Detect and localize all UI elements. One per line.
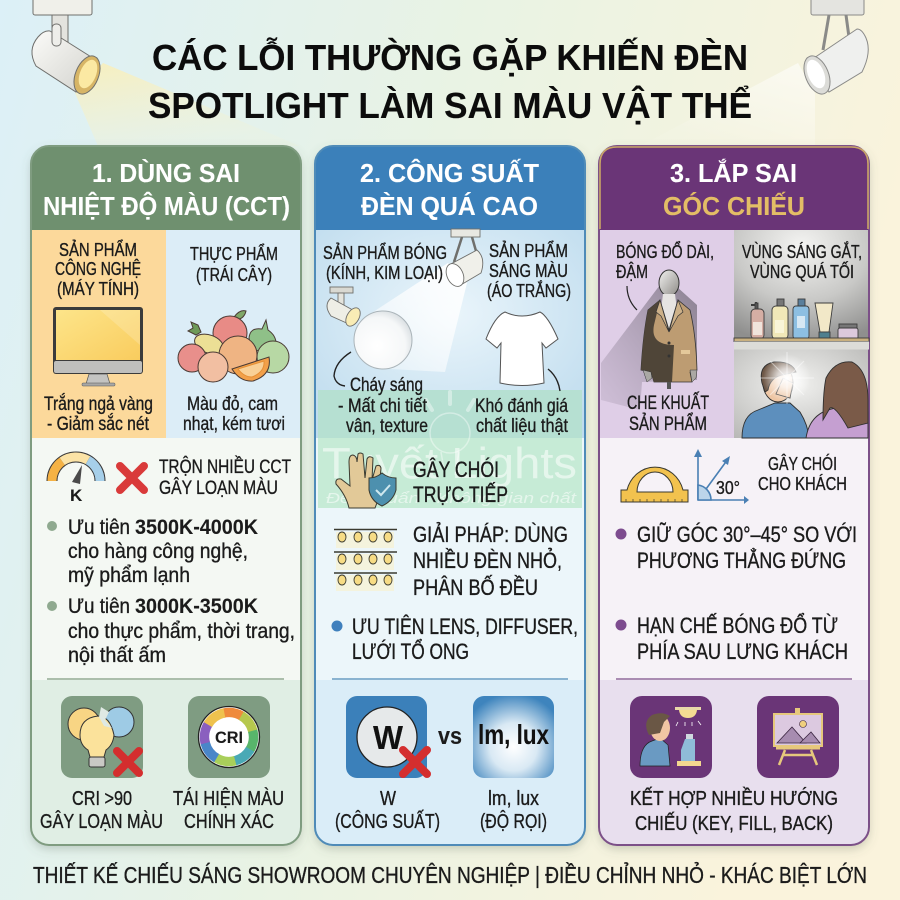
icon: protractor (621, 467, 688, 502)
heading 3 (663, 158, 805, 221)
icon: warm track spotlight (32, 0, 105, 98)
label: long shadow (616, 241, 714, 282)
title: SPOTLIGHT LÀM SAI MÀU VẬT THỂ (148, 84, 752, 126)
title (148, 36, 752, 126)
icon: watt crossed out: W (373, 719, 404, 756)
bullet: 3500K-4000K (47, 516, 258, 587)
header gold outline (600, 147, 868, 229)
caption: hides product (627, 392, 709, 435)
label: 30 degrees: 30° (716, 478, 740, 498)
label: light products: (ÁO TRẮNG) (487, 280, 571, 301)
caption: food result: nhạt, kém tươi (183, 414, 285, 435)
solution text (413, 522, 568, 600)
solution text: NHIỀU ĐÈN NHỎ, (413, 548, 562, 573)
watermark band: Đèn chuẩn - Không gian chất (326, 490, 577, 507)
warning: direct glare (413, 457, 508, 507)
caption: food result: Màu đỏ, cam (187, 394, 278, 415)
panel 3 content (599, 146, 869, 845)
warning: direct glare: GÂY CHÓI (413, 457, 499, 482)
bullet: 3000K-3500K: cho thực phẩm, thời trang, (68, 620, 295, 643)
captions: units: (ĐỘ RỌI) (480, 810, 547, 833)
heading 3: 3. LẮP SAI (670, 158, 797, 188)
icon: glossy sphere (354, 311, 412, 369)
solution text: GIẢI PHÁP: DÙNG (413, 522, 568, 547)
label: long shadow: BÓNG ĐỔ DÀI, (616, 241, 714, 262)
warning: glare for guests: CHO KHÁCH (758, 473, 847, 494)
warning: glare for guests (758, 453, 847, 494)
label: glossy products: SẢN PHẨM BÓNG (323, 242, 447, 263)
caption: multi-direction: KẾT HỢP NHIỀU HƯỚNG (630, 787, 838, 810)
glare flare (760, 352, 814, 404)
caption: food result (183, 394, 285, 435)
caption: burnout: Cháy sáng (350, 375, 423, 396)
captions: CRI: CHÍNH XÁC (184, 810, 274, 833)
bullet: 3500K-4000K: mỹ phẩm lạnh (68, 564, 190, 587)
bullet: 3000K-3500K (47, 595, 295, 667)
heading 2: 2. CÔNG SUẤT (360, 158, 539, 188)
caption: texture: chất liệu thật (476, 416, 569, 437)
label: food: THỰC PHẨM (190, 243, 278, 264)
icon: framed picture on easel (757, 696, 839, 778)
icon: red cross (120, 466, 144, 490)
label: harsh light: VÙNG QUÁ TỐI (750, 261, 854, 282)
icon: cosmetics shelf (734, 299, 869, 350)
bullet: limit shadow (616, 613, 848, 664)
caption: burnout (338, 375, 428, 437)
bullet: keep angle: PHƯƠNG THẲNG ĐỨNG (637, 548, 846, 573)
bullet: 3000K-3500K: Ưu tiên (68, 595, 130, 618)
warning: mixing CCT (159, 456, 291, 499)
bullet: lens and diffuser (332, 614, 578, 664)
warning: direct glare: TRỰC TIẾP (413, 482, 508, 507)
label: light products: SẢN PHẨM (489, 240, 568, 261)
icon: broken bulb (61, 696, 143, 778)
light beam from overhead lamp (358, 263, 467, 372)
label: long shadow: ĐẬM (616, 262, 648, 282)
caption: burnout: vân, texture (346, 416, 428, 437)
bullet: limit shadow: PHÍA SAU LƯNG KHÁCH (637, 639, 848, 664)
icon: watt crossed out (346, 696, 427, 778)
icon: computer monitor (53, 307, 143, 386)
heading 3: GÓC CHIẾU (663, 191, 805, 221)
bullet: lens and diffuser: LƯỚI TỔ ONG (352, 639, 469, 664)
icon: rows of small lamps (334, 530, 397, 591)
heading 2: ĐÈN QUÁ CAO (361, 191, 538, 221)
icon: CRI ring: CRI (215, 728, 243, 747)
bullet: 3500K-4000K: Ưu tiên (68, 516, 130, 539)
icon: curved arrow to burn note (334, 352, 351, 386)
bullet: 3000K-3500K: nội thất ấm (68, 644, 166, 667)
captions: units: W (380, 788, 396, 810)
label: glossy products (323, 242, 447, 283)
caption: texture (475, 396, 569, 437)
vs label: vs (438, 723, 462, 750)
icon: overhead spotlight (443, 229, 483, 289)
label: food: (TRÁI CÂY) (196, 265, 272, 285)
captions: CRI (40, 787, 284, 833)
caption: texture: Khó đánh giá (475, 396, 568, 417)
light beam: cool right (640, 63, 815, 146)
label: tech products: (MÁY TÍNH) (57, 279, 139, 299)
long shadow (601, 277, 697, 410)
icon: fruit pile (178, 311, 289, 382)
icon: small spotlight (327, 287, 363, 329)
bullet: keep angle (616, 522, 857, 573)
captions: CRI: TÁI HIỆN MÀU (173, 787, 284, 810)
caption: tech result (44, 393, 153, 435)
caption: tech result: Trắng ngả vàng (44, 393, 153, 415)
captions: CRI: CRI >90 (72, 788, 132, 810)
label: food (190, 243, 278, 285)
caption: hides product: SẢN PHẨM (629, 413, 707, 435)
captions: CRI: GÂY LOẠN MÀU (40, 810, 163, 833)
caption: burnout: - Mất chi tiết (338, 396, 428, 417)
warning: glare for guests: GÂY CHÓI (768, 453, 837, 474)
caption: tech result: - Giảm sắc nét (47, 413, 150, 435)
icon: CCT gauge: K (70, 486, 83, 505)
panel: 2 excessive power (315, 146, 585, 845)
caption: multi-direction (630, 787, 838, 835)
title: CÁC LỖI THƯỜNG GẶP KHIẾN ĐÈN (152, 36, 748, 78)
bullet: 3000K-3500K: 3000K-3500K (135, 595, 258, 618)
captions: units (335, 788, 547, 833)
heading 1: 1. DÙNG SAI (92, 158, 240, 188)
label: light products: SÁNG MÀU (489, 261, 568, 281)
watermark band: Tuyết Lights (322, 439, 577, 488)
label: tech products (55, 239, 141, 299)
icon: lumen lux: lm, lux (478, 719, 549, 750)
captions: units: (CÔNG SUẤT) (335, 810, 440, 833)
panel 1 content (31, 146, 301, 845)
icon: CCT gauge (52, 457, 100, 505)
heading 1: NHIỆT ĐỘ MÀU (CCT) (43, 191, 290, 221)
icon: mannequin with jacket (641, 270, 697, 389)
label: tech products: SẢN PHẨM (59, 239, 137, 260)
bullet: lens and diffuser: ƯU TIÊN LENS, DIFFUSER, (352, 614, 578, 639)
icon: lumen lux (473, 696, 554, 778)
label: harsh light (742, 241, 862, 282)
watermark band (318, 390, 582, 508)
icon: angle diagram (694, 449, 749, 504)
warning: mixing CCT: GÂY LOẠN MÀU (159, 477, 278, 499)
caption: hides product: CHE KHUẤT (627, 392, 709, 414)
light beam: warm left (75, 63, 300, 146)
label: harsh light: VÙNG SÁNG GẮT, (742, 241, 862, 262)
icon: hand and shield (336, 453, 396, 508)
bullet: limit shadow: HẠN CHẾ BÓNG ĐỔ TỪ (637, 613, 838, 638)
panel: 3 wrong beam angle (599, 146, 869, 845)
caption: multi-direction: CHIẾU (KEY, FILL, BACK) (635, 812, 833, 835)
illustration: customer dazzled by glare (742, 362, 868, 438)
icon: CRI ring (188, 696, 270, 778)
warning: mixing CCT: TRỘN NHIỀU CCT (159, 456, 291, 478)
label: glossy products: (KÍNH, KIM LOẠI) (326, 263, 443, 283)
solution text: PHÂN BỐ ĐỀU (413, 574, 538, 600)
label: tech products: CÔNG NGHỆ (55, 258, 141, 279)
bullet: keep angle: GIỮ GÓC 30°–45° SO VỚI (637, 522, 857, 547)
panel: 1 wrong colour temperature (31, 146, 301, 845)
icon: cool track spotlight (799, 0, 868, 98)
bullet: 3500K-4000K: 3500K-4000K (135, 516, 258, 539)
icon: arrow to shadow (627, 286, 637, 310)
panel 2 content (315, 146, 585, 845)
captions: units: lm, lux (488, 788, 539, 810)
icon: person with lamp and bottle (630, 696, 712, 778)
icon: arrow to shirt note (548, 369, 560, 391)
label: light products (487, 240, 571, 301)
bullet: 3500K-4000K: cho hàng công nghệ, (68, 540, 248, 563)
heading 1 (43, 158, 290, 221)
heading 2 (360, 158, 539, 221)
icon: white t-shirt (486, 312, 558, 386)
